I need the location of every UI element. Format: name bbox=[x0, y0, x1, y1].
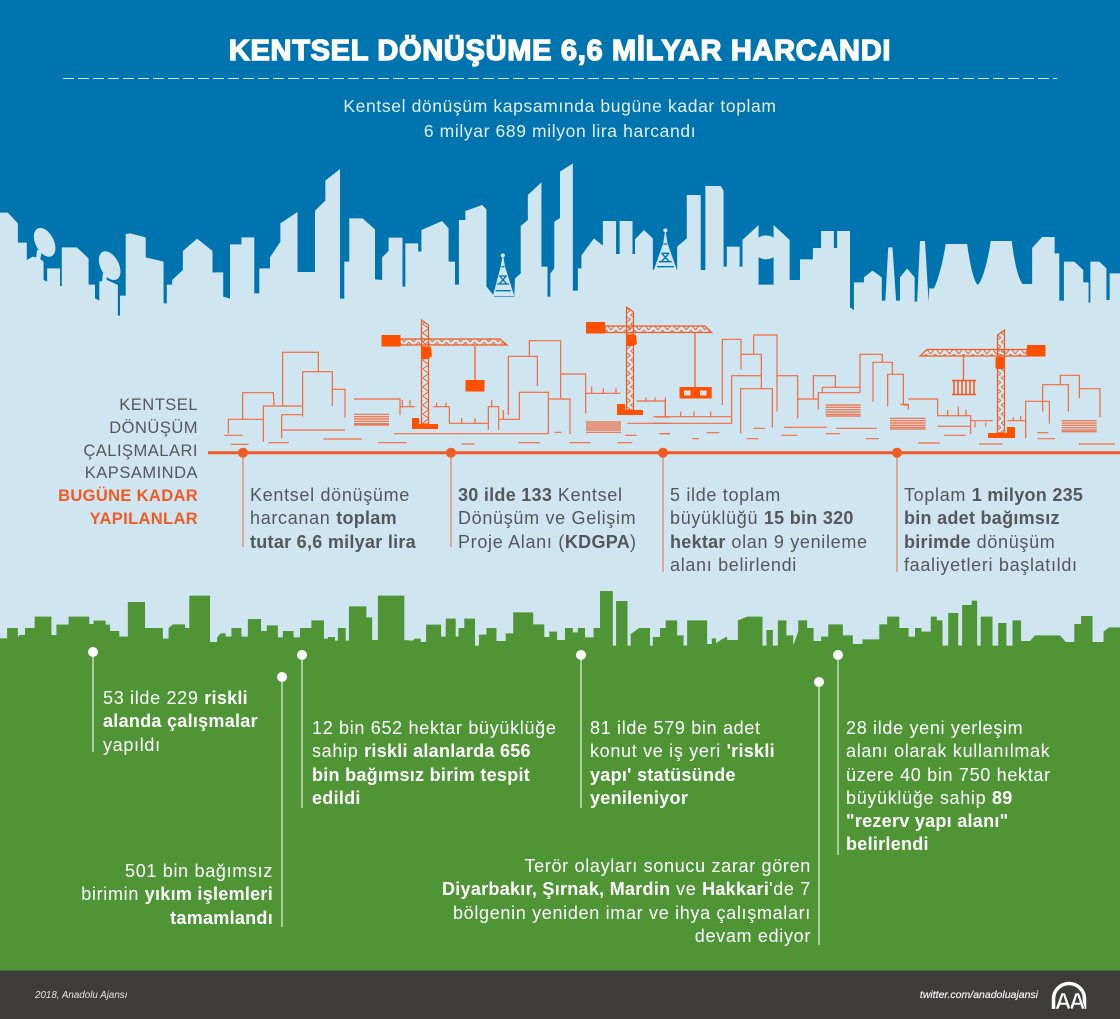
text block: demolition: birimin yıkım işlemleri bbox=[81, 884, 273, 904]
text block: total spending: Kentsel dönüşüme bbox=[250, 485, 410, 505]
footer social handle: twitter.com/anadoluajansi bbox=[920, 989, 1038, 1001]
orange construction line art, right bbox=[653, 335, 1115, 444]
section label: KENTSEL bbox=[119, 396, 198, 414]
text block: hectares: bin bağımsız birim tespit bbox=[312, 765, 530, 785]
text block: demolition: 501 bin bağımsız bbox=[125, 861, 273, 881]
text block: renewal areas: hektar olan 9 yenileme bbox=[670, 532, 868, 552]
light skyline left bbox=[0, 169, 561, 350]
text block: reserve areas: büyüklüğe sahip 89 bbox=[846, 788, 1013, 808]
icon: radio tower left bbox=[493, 253, 514, 296]
timeline with four markers bbox=[208, 448, 1120, 572]
text block: independent units: faaliyetleri başlatıldı bbox=[904, 555, 1078, 575]
blue sky background bbox=[0, 0, 1120, 330]
text block: project areas bbox=[458, 485, 637, 552]
text block: reserve areas: 28 ilde yeni yerleşim bbox=[846, 718, 1023, 738]
section label: YAPILANLAR bbox=[90, 510, 198, 528]
text block: terror-affected regions: devam ediyor bbox=[695, 926, 811, 946]
text block: risky structures: 81 ilde 579 bin adet bbox=[590, 718, 761, 738]
text block: independent units: Toplam 1 milyon 235 bbox=[904, 485, 1083, 505]
text block: hectares: edildi bbox=[312, 788, 361, 808]
text block: independent units: bin adet bağımsız bbox=[904, 508, 1060, 528]
text block: renewal areas: büyüklüğü 15 bin 320 bbox=[670, 508, 854, 528]
text block: reserve areas bbox=[846, 718, 1051, 854]
subtitle: Kentsel dönüşüm kapsamında bugüne kadar toplam bbox=[343, 96, 777, 116]
section label: ÇALIŞMALARI bbox=[83, 442, 198, 460]
text block: terror-affected regions: bölgenin yeniden imar ve ihya çalışmaları bbox=[453, 903, 811, 923]
text block: reserve areas: "rezerv yapı alanı" bbox=[846, 811, 1008, 831]
text block: renewal areas: 5 ilde toplam bbox=[670, 485, 781, 505]
text block: independent units bbox=[904, 485, 1083, 575]
section label: BUGÜNE KADAR bbox=[58, 487, 198, 505]
text block: renewal areas: alanı belirlendi bbox=[670, 555, 797, 575]
text block: independent units: birimde dönüşüm bbox=[904, 532, 1055, 552]
orange construction line art, left and centre bbox=[224, 341, 670, 444]
text block: risky structures bbox=[590, 718, 775, 808]
text block: project areas: 30 ilde 133 Kentsel bbox=[458, 485, 623, 505]
section label bbox=[58, 396, 198, 528]
text block: total spending bbox=[250, 485, 416, 552]
text block: demolition: tamamlandı bbox=[170, 908, 273, 928]
crane 1 bbox=[382, 320, 507, 429]
text block: total spending: tutar 6,6 milyar lira bbox=[250, 532, 416, 552]
text block: hectares: 12 bin 652 hektar büyüklüğe bbox=[312, 718, 557, 738]
text block: terror-affected regions: Diyarbakır, Şırnak, Mardin ve Hakkari'de 7 bbox=[442, 879, 811, 899]
text block: terror-affected regions bbox=[442, 856, 811, 946]
text block: total spending: harcanan toplam bbox=[250, 508, 397, 528]
footer bar bbox=[0, 970, 1120, 1019]
text block: risky structures: yenileniyor bbox=[590, 788, 688, 808]
text block: renewal areas bbox=[670, 485, 868, 575]
text block: terror-affected regions: Terör olayları sonucu zarar gören bbox=[524, 856, 811, 876]
footer credit: 2018, Anadolu Ajansı bbox=[35, 990, 127, 1001]
text block: risky areas: 53 ilde 229 riskli bbox=[103, 688, 248, 708]
crane 3 bbox=[920, 330, 1046, 438]
text block: risky areas: alanda çalışmalar bbox=[103, 711, 258, 731]
text block: reserve areas: belirlendi bbox=[846, 834, 929, 854]
text block: reserve areas: alanı olarak kullanılmak bbox=[846, 741, 1050, 761]
logo: Anadolu Ajansı: AA bbox=[1055, 988, 1085, 1014]
section label: KAPSAMINDA bbox=[85, 464, 198, 482]
text block: demolition bbox=[81, 861, 273, 928]
crane 2 bbox=[586, 307, 712, 415]
light skyline right bbox=[560, 163, 1120, 383]
green skyline and ground bbox=[0, 591, 1120, 972]
text block: risky areas: yapıldı bbox=[103, 735, 161, 755]
title underline dashes bbox=[63, 78, 1057, 80]
section label: DÖNÜŞÜM bbox=[109, 419, 198, 437]
subtitle bbox=[343, 96, 777, 141]
text block: risky areas bbox=[103, 688, 258, 755]
white callout pins bbox=[88, 648, 842, 945]
subtitle: 6 milyar 689 milyon lira harcandı bbox=[424, 121, 696, 141]
text block: hectares bbox=[312, 718, 557, 808]
text block: risky structures: yapı' statüsünde bbox=[590, 765, 736, 785]
text block: project areas: Proje Alanı (KDGPA) bbox=[458, 532, 637, 552]
text block: hectares: sahip riskli alanlarda 656 bbox=[312, 741, 531, 761]
text block: project areas: Dönüşüm ve Gelişim bbox=[458, 508, 636, 528]
text block: risky structures: konut ve iş yeri 'riskli bbox=[590, 741, 775, 761]
title: KENTSEL DÖNÜŞÜME 6,6 MİLYAR HARCANDI bbox=[229, 35, 891, 67]
icon: radio tower right bbox=[654, 228, 677, 271]
text block: reserve areas: üzere 40 bin 750 hektar bbox=[846, 765, 1051, 785]
